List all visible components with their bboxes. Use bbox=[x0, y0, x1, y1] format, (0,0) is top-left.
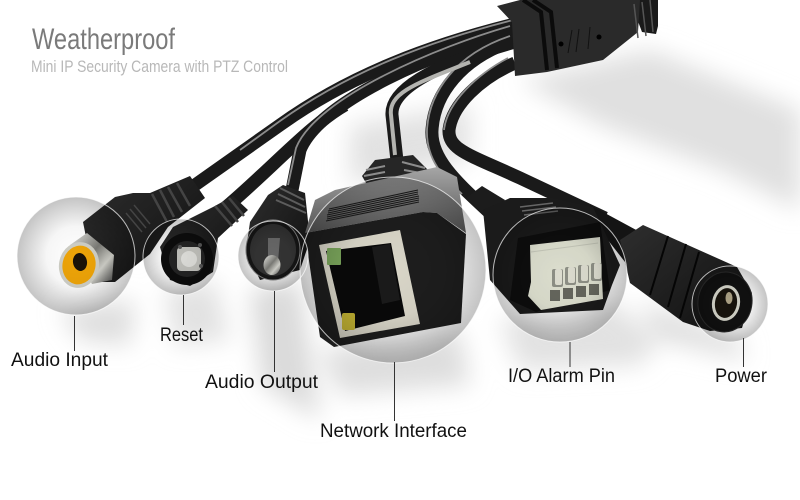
power connector bbox=[620, 225, 757, 336]
title: Weatherproof bbox=[32, 23, 176, 56]
label: audio output: Audio Output bbox=[205, 372, 319, 393]
green LED bbox=[327, 248, 341, 265]
label: I/O alarm pin: I/O Alarm Pin bbox=[508, 366, 615, 387]
subtitle: Mini IP Security Camera with PTZ Control bbox=[31, 57, 288, 76]
label: reset: Reset bbox=[160, 325, 204, 346]
label: power: Power bbox=[715, 366, 768, 387]
alarm terminal block bbox=[528, 237, 603, 310]
molded cable junction bbox=[497, 0, 658, 76]
label: network interface: Network Interface bbox=[320, 421, 467, 442]
I/O alarm connector bbox=[466, 186, 640, 314]
leader lines bbox=[74, 291, 744, 421]
RCA socket bbox=[55, 238, 103, 292]
lens rims bbox=[17, 177, 768, 363]
label: audio input: Audio Input bbox=[11, 350, 109, 371]
highlight lens circles bbox=[17, 177, 768, 363]
audio input connector bbox=[55, 176, 205, 292]
reset connector bbox=[160, 196, 248, 286]
audio output connector bbox=[246, 185, 310, 280]
reflections and shadows bbox=[60, 50, 800, 420]
yellow LED bbox=[342, 313, 355, 330]
network connector bbox=[305, 155, 466, 347]
cables bbox=[195, 20, 605, 218]
